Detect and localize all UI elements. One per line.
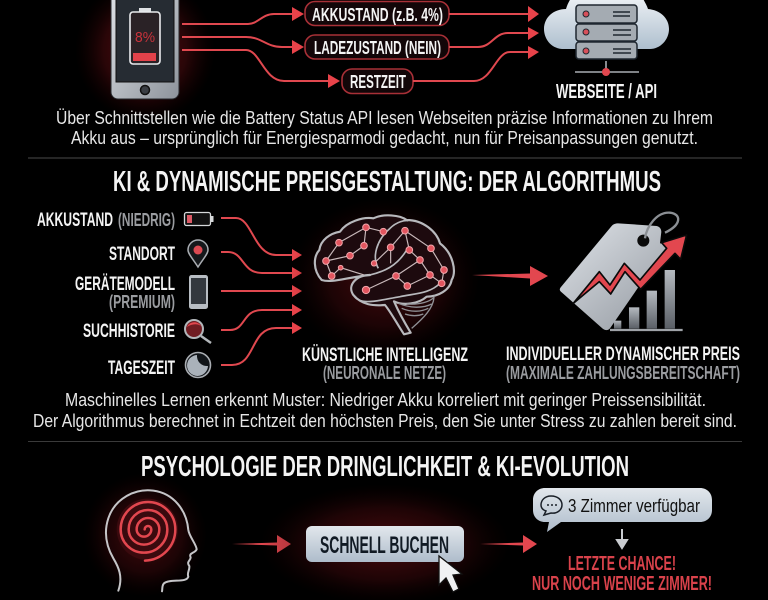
pill: Akkustand — [305, 2, 449, 26]
description: Battery API: Akku aus – ursprünglich für Energiesparmodi gedacht, nun für Preisanpassungen genutzt. — [71, 128, 698, 148]
panel: dynamic price — [506, 213, 740, 383]
input: Gerätemodell: GERÄTEMODELL — [75, 274, 175, 295]
chat bubble: 3 Zimmer verfügbar: 3 Zimmer verfügbar — [568, 496, 700, 516]
icon: mouse cursor — [439, 556, 462, 592]
panel: algorithm inputs — [37, 210, 302, 379]
icon: head with spiral — [106, 490, 197, 591]
brain glow — [290, 198, 480, 358]
panel: Battery Status API — [56, 0, 713, 148]
flow lines: inputs to AI — [221, 218, 302, 365]
button: Schnell buchen: SCHNELL BUCHEN — [320, 532, 449, 559]
warning text — [532, 553, 712, 595]
pill: Akkustand: AKKUSTAND (z.B. 4%) — [312, 5, 443, 25]
icon: neural brain — [315, 215, 454, 334]
pill: Restzeit: RESTZEIT — [350, 72, 406, 92]
input: Suchhistorie: SUCHHISTORIE — [83, 321, 175, 342]
description: Battery API — [56, 108, 713, 148]
arrow: AI to price — [472, 266, 548, 286]
input: Standort: STANDORT — [109, 244, 175, 265]
arrow: button to bubble — [480, 535, 537, 553]
description: machine learning — [33, 390, 737, 431]
input: Akkustand: (NIEDRIG) — [118, 210, 175, 230]
icon: phone with low battery — [111, 0, 179, 99]
button: Schnell buchen — [306, 526, 464, 562]
chat bubble: 3 Zimmer verfügbar — [533, 488, 712, 532]
icon: price tag with rising chart — [560, 213, 687, 330]
warning text: LETZTE CHANCE! — [568, 553, 676, 575]
pill: Restzeit — [342, 69, 413, 94]
label: Webseite / API: WEBSEITE / API — [556, 81, 657, 103]
button glow — [260, 484, 510, 600]
flow lines: phone to data pills — [182, 7, 340, 88]
input: Gerätemodell: (PREMIUM) — [109, 292, 175, 312]
pill: Ladezustand: LADEZUSTAND (NEIN) — [314, 38, 441, 58]
icon: phone with low battery: 8% — [135, 29, 155, 46]
panel: urgency psychology — [83, 473, 712, 600]
panel: artificial intelligence — [290, 198, 480, 383]
flow lines: pills to website — [413, 6, 539, 81]
icon: cloud server — [544, 0, 669, 76]
arrow: down — [617, 529, 627, 548]
pill: Ladezustand — [305, 35, 449, 59]
input: Gerätemodell — [75, 274, 208, 312]
label: Künstliche Intelligenz: KÜNSTLICHE INTELLIGENZ — [302, 343, 468, 366]
input: Tageszeit: TAGESZEIT — [108, 358, 175, 379]
phone glow — [75, 0, 215, 122]
head glow — [83, 473, 207, 597]
input: Akkustand — [37, 210, 214, 231]
sublabel: Neuronale Netze: (NEURONALE NETZE) — [323, 362, 446, 383]
arrow: head to button — [232, 535, 291, 553]
input: Akkustand: AKKUSTAND — [37, 210, 113, 231]
